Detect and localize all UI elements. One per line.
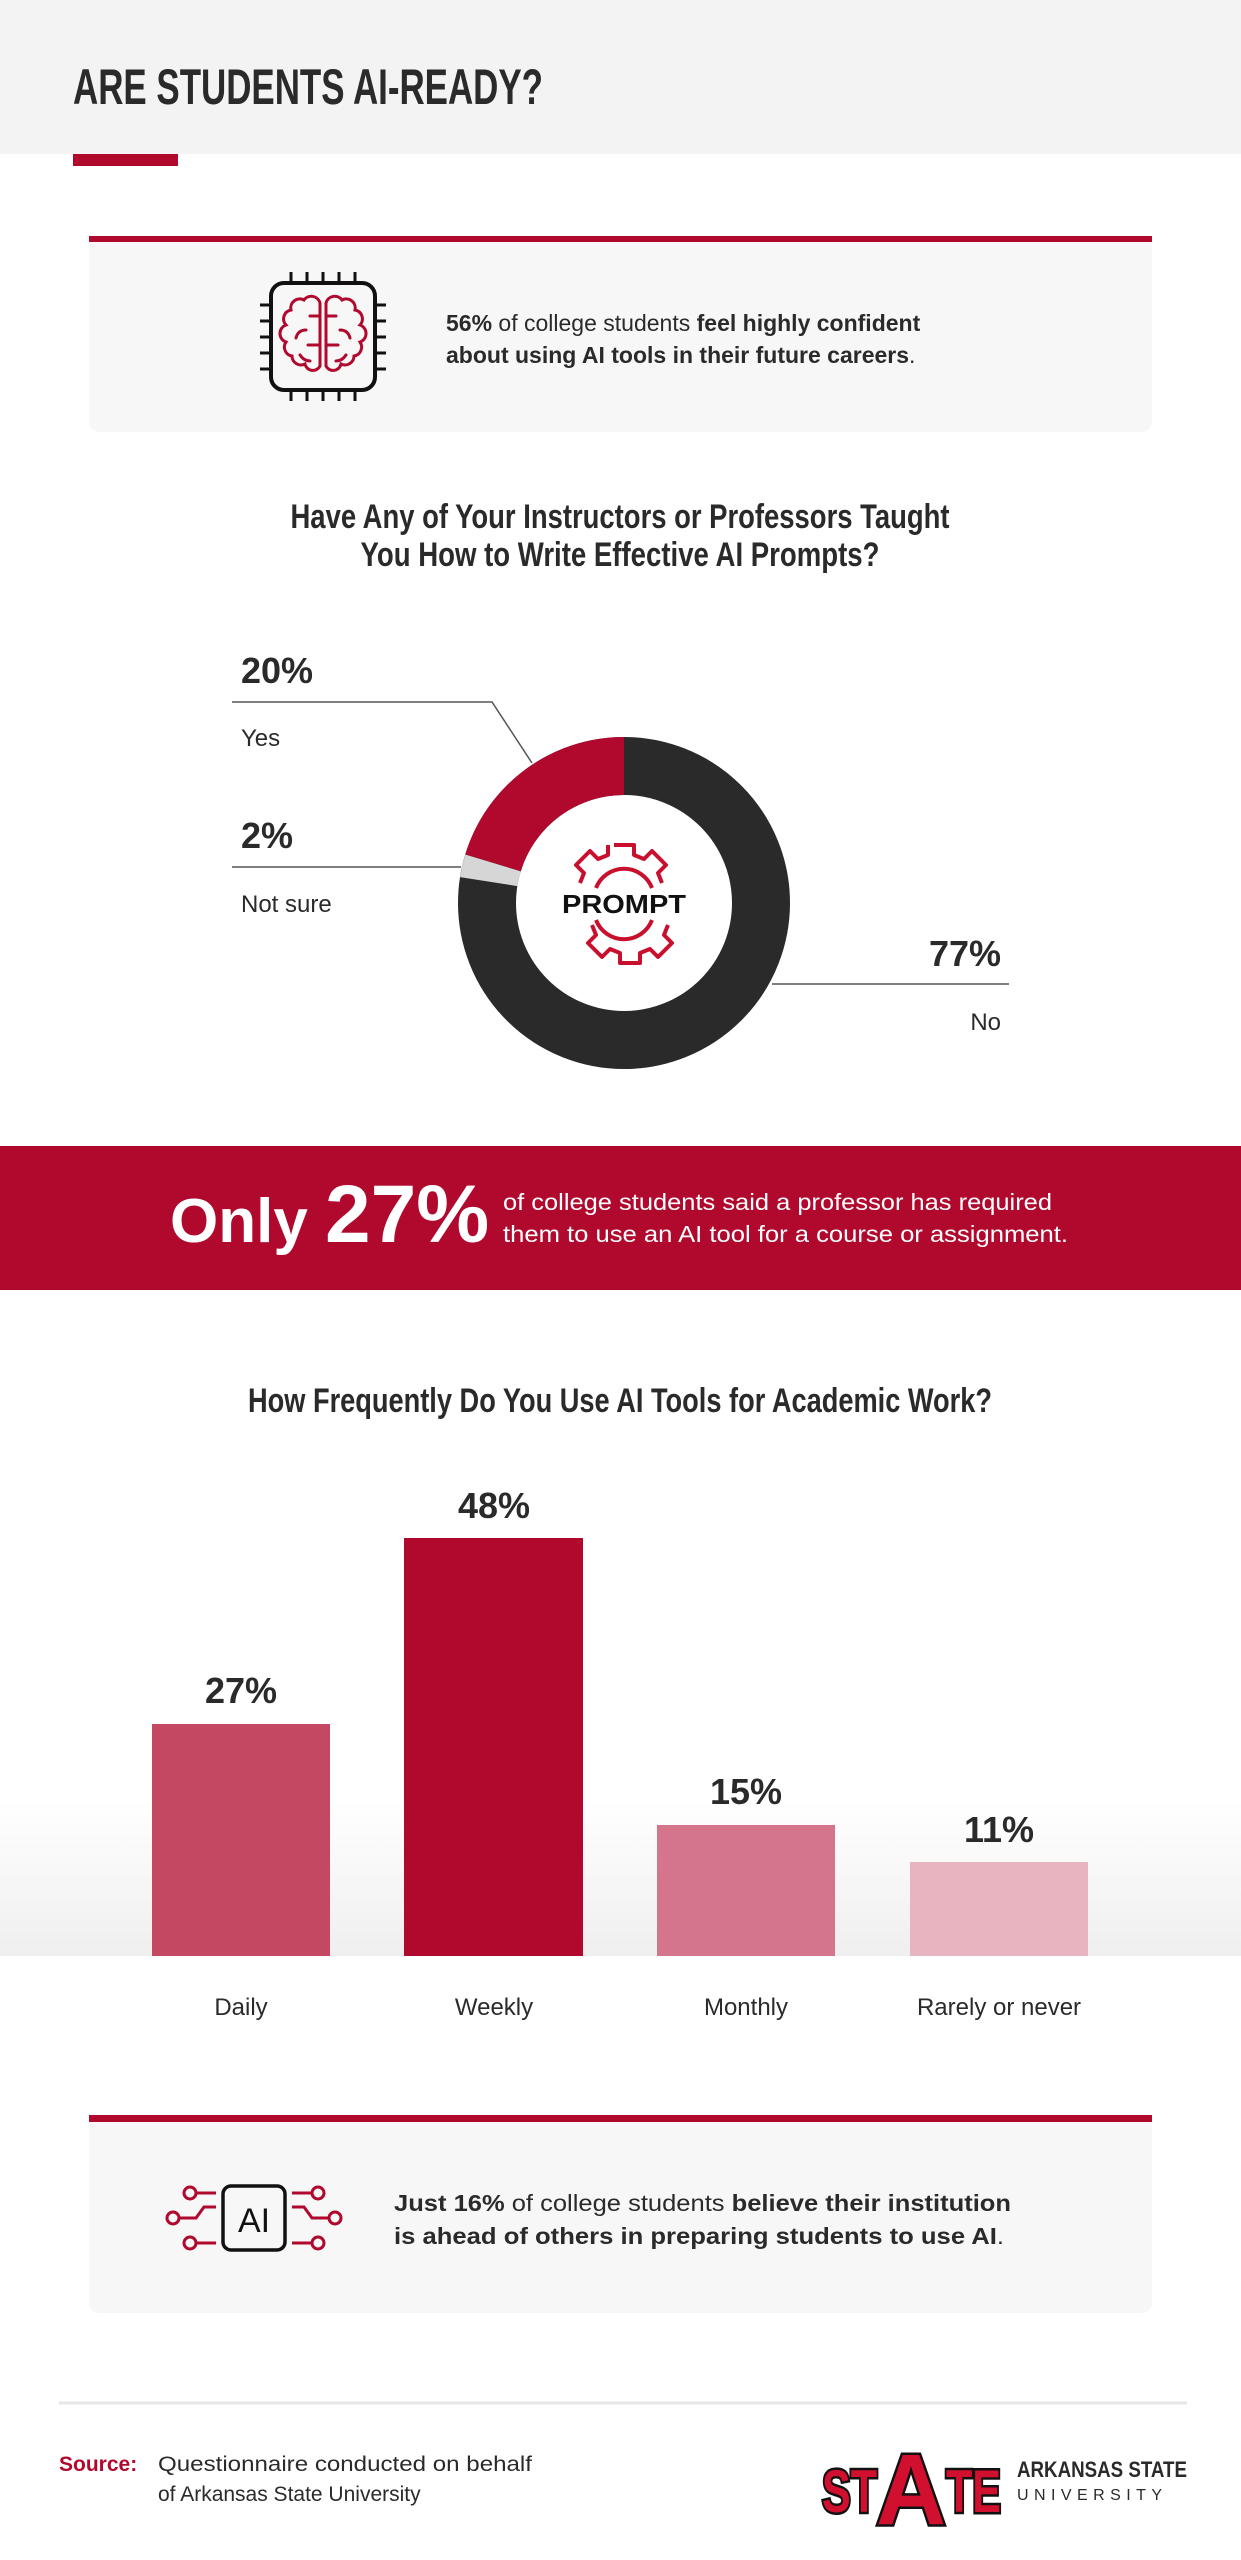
callout: yes 20%: Yes [241, 725, 280, 752]
logo: Arkansas State: ARKANSAS STATE [1017, 2457, 1187, 2482]
heading: prompts question: You How to Write Effective AI Prompts? [360, 536, 880, 574]
callout: yes 20%: 20% [241, 650, 313, 691]
bar: daily [152, 1670, 330, 2021]
callout: yes 20% [232, 650, 532, 763]
icon: brain chip [260, 272, 386, 401]
panel: institution stat: is ahead of others in preparing students to use AI . [394, 2223, 1004, 2249]
bar: daily: Daily [214, 1994, 268, 2021]
logo: Arkansas State: A [876, 2434, 946, 2546]
title: ARE STUDENTS AI-READY? [73, 59, 543, 115]
source note: Questionnaire conducted on behalf [158, 2453, 532, 2476]
header band [0, 0, 1241, 154]
bar: rarely: Rarely or never [917, 1994, 1081, 2021]
bar chart [0, 1485, 1241, 2021]
banner: only 27%: Only 27% [170, 1169, 489, 1260]
panel: institution stat [89, 2115, 1152, 2313]
source note: Source: [59, 2453, 137, 2476]
logo: Arkansas State: ST [822, 2458, 877, 2525]
callout: no 77%: No [970, 1009, 1001, 1036]
callout: not sure 2%: Not sure [241, 891, 332, 918]
source note [59, 2453, 532, 2506]
bar: monthly: Monthly [704, 1994, 788, 2021]
callout: no 77%: 77% [929, 933, 1001, 974]
icon: prompt gear: PROMPT [562, 889, 686, 919]
callout: not sure 2%: 2% [241, 815, 293, 856]
title accent bar [73, 154, 178, 166]
stat text: 56% of college students feel highly confident [446, 310, 921, 336]
bar: weekly [404, 1485, 583, 2021]
heading: prompts question: Have Any of Your Instructors or Professors Taught [290, 498, 950, 536]
panel: confidence stat: about using AI tools in their future careers. [446, 342, 915, 368]
bar: rarely [910, 1809, 1088, 2021]
banner: only 27% [0, 1146, 1241, 1290]
logo: Arkansas State [822, 2434, 1187, 2546]
bar: monthly: 15% [710, 1771, 782, 1812]
banner: only 27%: of college students said a professor has required [503, 1189, 1052, 1215]
donut chart [487, 766, 761, 1040]
bar: rarely: 11% [964, 1809, 1034, 1850]
icon: prompt gear [562, 845, 686, 963]
panel: confidence stat [89, 236, 1152, 432]
bar: weekly: Weekly [455, 1994, 533, 2021]
bar: daily: 27% [205, 1670, 277, 1711]
logo: Arkansas State: UNIVERSITY [1017, 2487, 1162, 2504]
bar: monthly [657, 1771, 835, 2021]
callout: not sure 2% [232, 815, 461, 918]
callout: no 77% [772, 933, 1009, 1036]
source note: of Arkansas State University [158, 2483, 421, 2506]
heading: frequency question: How Frequently Do You Use AI Tools for Academic Work? [248, 1382, 992, 1420]
icon: AI circuit: AI [238, 2202, 270, 2240]
banner: only 27%: them to use an AI tool for a course or assignment. [503, 1221, 1068, 1247]
icon: AI circuit [167, 2186, 341, 2250]
logo: Arkansas State: TE [946, 2458, 1001, 2525]
heading: prompts question [290, 498, 950, 574]
stat text: Just 16% of college students believe their institution [394, 2190, 1011, 2216]
bar: weekly: 48% [458, 1485, 530, 1526]
